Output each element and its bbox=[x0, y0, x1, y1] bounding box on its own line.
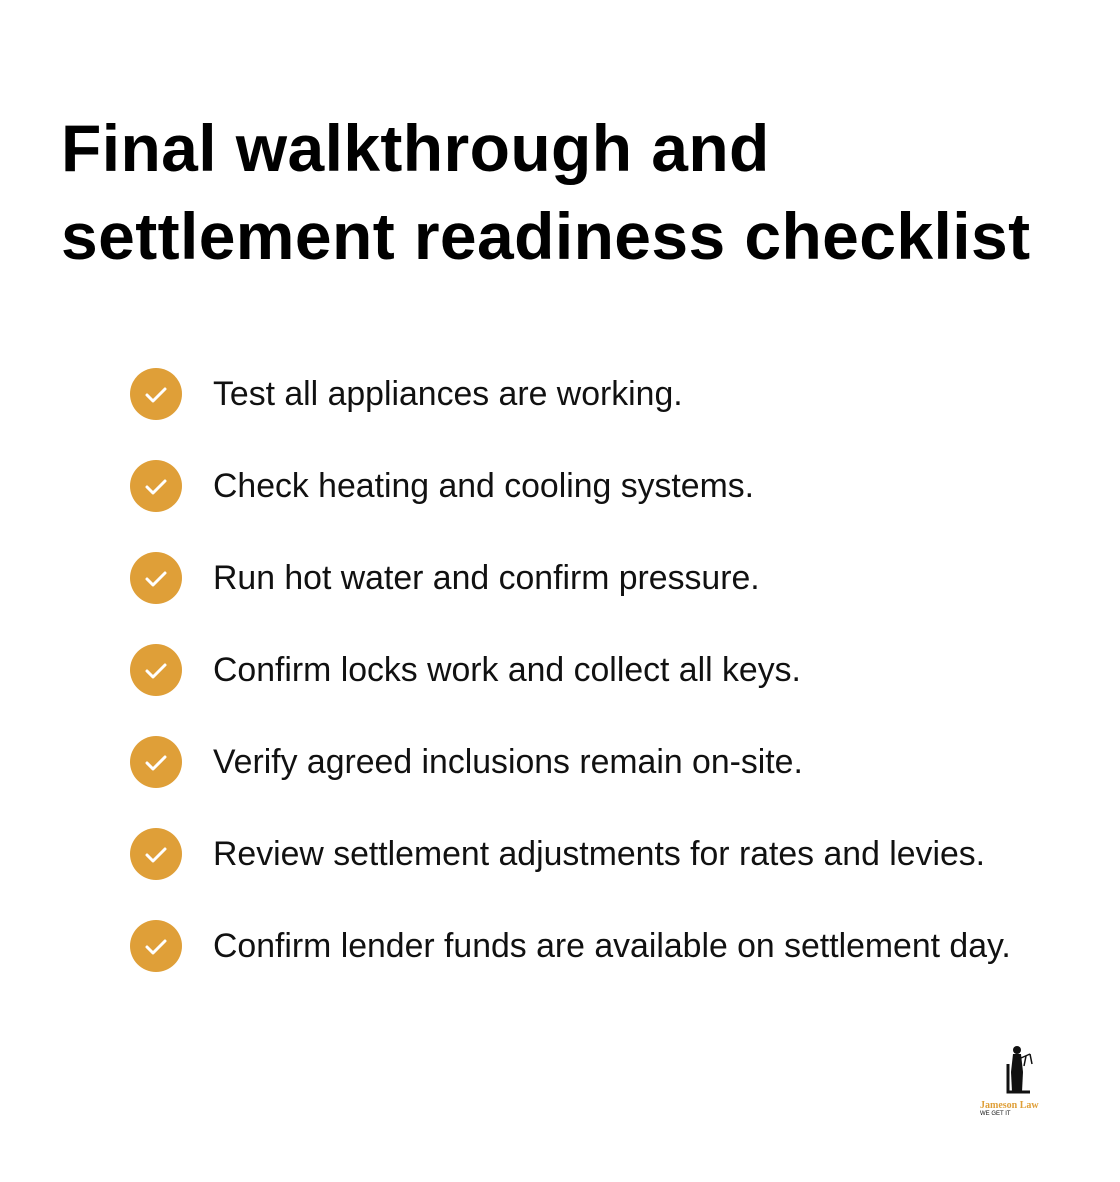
item 4: Confirm locks work and collect all keys. bbox=[213, 651, 801, 689]
item 7: Confirm lender funds are available on settlement day. bbox=[213, 927, 1011, 965]
item 5 bbox=[130, 736, 803, 788]
item 6 bbox=[130, 828, 985, 880]
title: settlement readiness checklist bbox=[61, 199, 1030, 273]
title bbox=[61, 111, 1030, 273]
logo: WE GET IT bbox=[980, 1111, 1011, 1117]
logo bbox=[980, 1046, 1039, 1117]
item 2: Check heating and cooling systems. bbox=[213, 467, 754, 505]
item 3: Run hot water and confirm pressure. bbox=[213, 559, 760, 597]
item 1 bbox=[130, 368, 683, 420]
item 4 bbox=[130, 644, 801, 696]
item 7 bbox=[130, 920, 1011, 972]
item 5: Verify agreed inclusions remain on-site. bbox=[213, 743, 803, 781]
title: Final walkthrough and bbox=[61, 111, 770, 185]
item 6: Review settlement adjustments for rates and levies. bbox=[213, 835, 985, 873]
item 2 bbox=[130, 460, 754, 512]
item 3 bbox=[130, 552, 760, 604]
logo: Jameson Law bbox=[980, 1100, 1039, 1111]
item 1: Test all appliances are working. bbox=[213, 375, 683, 413]
